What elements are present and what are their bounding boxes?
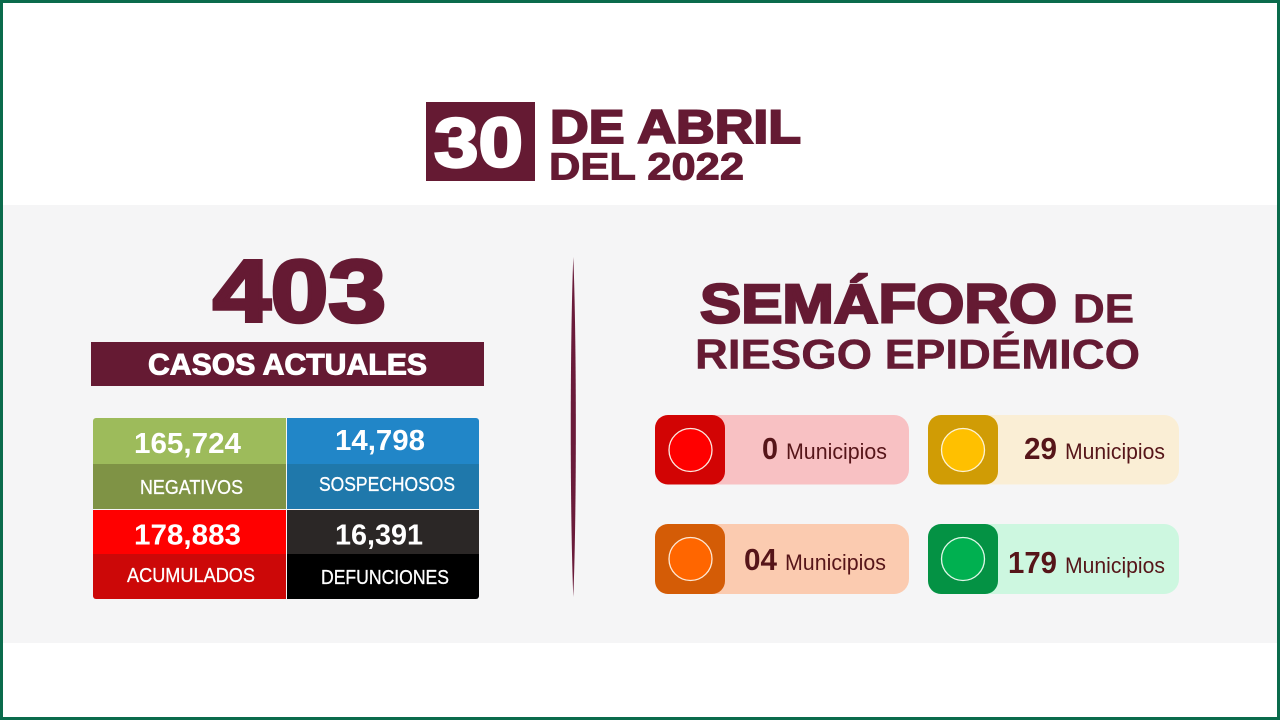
panel: current cases bbox=[91, 242, 484, 599]
card: yellow municipalities: Municipios bbox=[1065, 439, 1165, 464]
card: orange municipalities bbox=[655, 524, 909, 594]
stat: defunciones: DEFUNCIONES bbox=[321, 567, 449, 589]
card: red municipalities: 0 bbox=[762, 431, 778, 466]
stat: acumulados bbox=[93, 510, 286, 599]
card: orange municipalities: Municipios bbox=[785, 550, 886, 575]
heading: semaforo de riesgo epidemico: DE bbox=[1073, 286, 1134, 332]
heading: semaforo de riesgo epidemico: RIESGO EPIDÉMICO bbox=[695, 330, 1140, 378]
stat: sospechosos bbox=[287, 418, 479, 509]
card: green municipalities: Municipios bbox=[1065, 553, 1165, 578]
big number: current cases: 403 bbox=[213, 242, 386, 340]
panel: gray background band bbox=[3, 205, 1277, 643]
card: green municipalities: 179 bbox=[1008, 545, 1057, 580]
panel: semaforo bbox=[655, 272, 1179, 594]
banner: casos actuales bbox=[91, 342, 484, 386]
stat: acumulados: 178,883 bbox=[134, 520, 241, 552]
banner: casos actuales: CASOS ACTUALES bbox=[148, 348, 427, 382]
card: yellow municipalities bbox=[928, 415, 1179, 484]
date day box: 30 bbox=[434, 104, 523, 182]
stat: defunciones: 16,391 bbox=[335, 520, 423, 552]
stat: defunciones bbox=[287, 510, 479, 599]
stat: sospechosos: SOSPECHOSOS bbox=[319, 474, 455, 496]
date year: DEL 2022 bbox=[549, 146, 744, 188]
date month: DE ABRIL bbox=[550, 100, 801, 153]
vertical divider bbox=[571, 257, 576, 597]
stat: sospechosos: 14,798 bbox=[335, 425, 425, 457]
card: yellow municipalities: 29 bbox=[1024, 431, 1057, 466]
card: orange municipalities: 04 bbox=[744, 542, 778, 577]
statistics table bbox=[93, 418, 479, 599]
title: date bbox=[426, 100, 801, 188]
stat: negativos: 165,724 bbox=[134, 428, 241, 460]
stat: negativos bbox=[93, 418, 286, 509]
card: green municipalities bbox=[928, 524, 1179, 594]
stat: negativos: NEGATIVOS bbox=[140, 477, 243, 499]
heading: semaforo de riesgo epidemico: SEMÁFORO bbox=[700, 272, 1057, 334]
heading: semaforo de riesgo epidemico bbox=[695, 272, 1140, 378]
stat: acumulados: ACUMULADOS bbox=[127, 565, 255, 587]
card: red municipalities bbox=[655, 415, 909, 484]
card: red municipalities: Municipios bbox=[786, 439, 887, 464]
